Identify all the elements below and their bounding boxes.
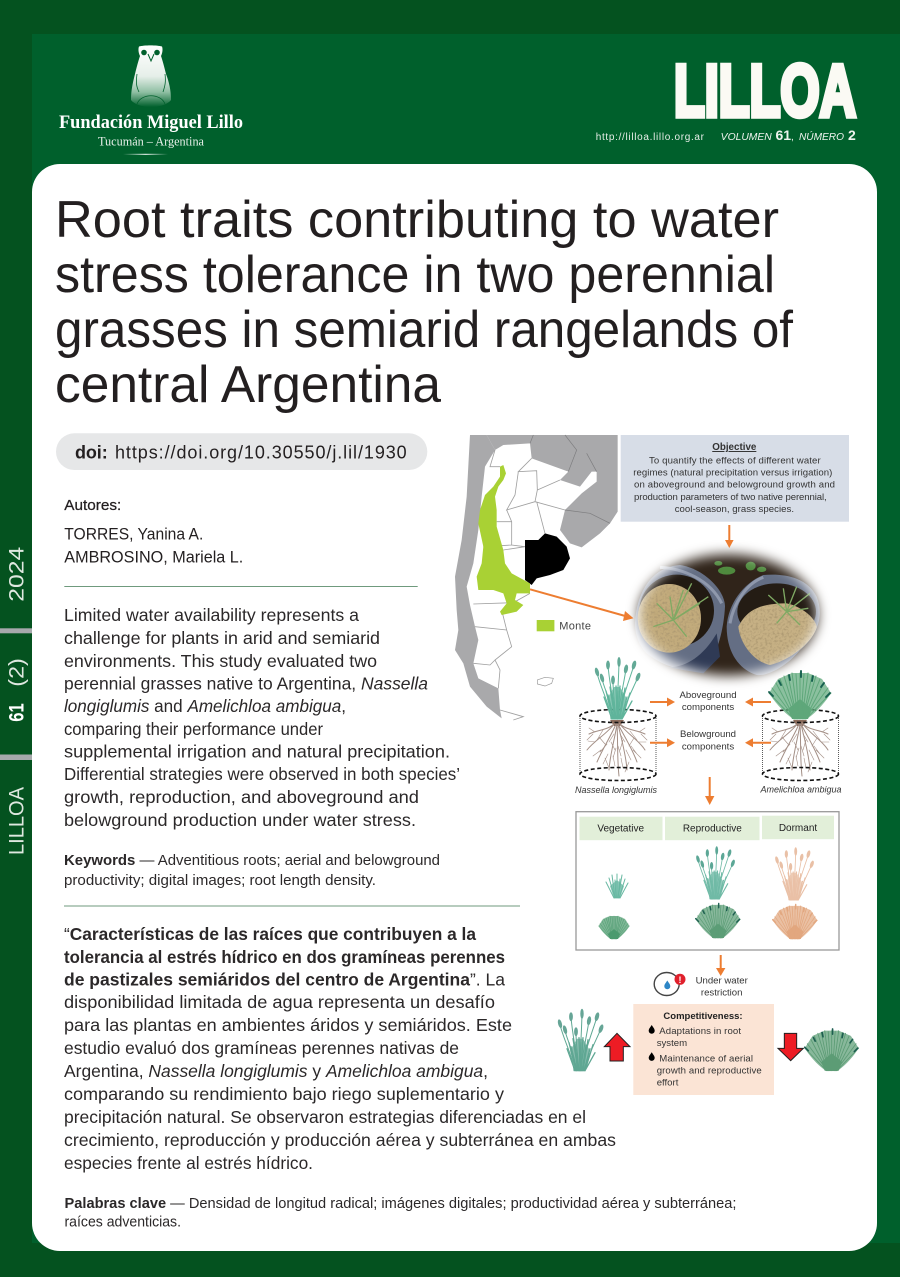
growth stages table xyxy=(576,812,839,950)
english abstract: growth, reproduction, and aboveground and xyxy=(64,787,419,807)
volume and number: 2 xyxy=(848,127,856,143)
plant: Amelichloa xyxy=(805,1029,859,1071)
white content card xyxy=(32,164,877,1251)
sidebar issue: (2) xyxy=(5,658,28,687)
objective heading: Objective xyxy=(712,442,757,453)
english abstract: challenge for plants in arid and semiarid xyxy=(64,628,380,648)
sidebar separators xyxy=(0,628,32,760)
component labels: Belowground xyxy=(680,729,736,740)
competitiveness list: system xyxy=(657,1038,687,1049)
title: central Argentina xyxy=(55,356,441,414)
title: stress tolerance in two perennial xyxy=(55,246,775,304)
component labels: components xyxy=(682,702,734,713)
english abstract: belowground production under water stress. xyxy=(64,810,416,830)
spanish abstract: especies frente al estrés hídrico. xyxy=(64,1153,313,1173)
legend: Monte: Monte xyxy=(559,620,591,632)
journal masthead xyxy=(596,51,856,143)
component labels: Aboveground xyxy=(679,690,737,701)
spanish abstract: crecimiento, reproducción y producción aérea y subterránea en ambas xyxy=(64,1130,616,1150)
volume and number: 61 xyxy=(776,127,791,143)
reproductive plants xyxy=(695,846,740,938)
photo of two grass bags xyxy=(629,544,828,686)
logo: Fundación Miguel Lillo xyxy=(59,45,243,155)
provincial borders xyxy=(473,450,565,720)
competitiveness box xyxy=(633,1004,774,1095)
icon: water restriction: ! xyxy=(678,975,682,985)
dormant plants xyxy=(773,847,817,939)
sidebar xyxy=(0,546,32,855)
title: grasses in semiarid rangelands of xyxy=(55,301,794,359)
sidebar volume: 61 xyxy=(5,703,28,722)
stage headers: Dormant xyxy=(779,823,817,834)
authors xyxy=(64,498,243,567)
spanish abstract: precipitación natural. Se observaron estrategias diferenciadas en el xyxy=(64,1107,586,1127)
spanish abstract xyxy=(64,924,616,1173)
author names: AMBROSINO, Mariela L. xyxy=(64,549,243,567)
doi pill xyxy=(56,433,427,470)
bullet drops xyxy=(649,1025,655,1061)
spanish abstract: comparando su rendimiento bajo riego suplementario y xyxy=(64,1084,504,1104)
volume and number: VOLUMEN xyxy=(721,132,773,143)
competitiveness list: growth and reproductive xyxy=(657,1066,762,1076)
authors label: Autores: xyxy=(64,498,121,514)
objective text: To quantify the effects of different water xyxy=(649,455,821,466)
spanish keywords: Palabras clave — Densidad de longitud radical; imágenes digitales; productividad aérea y subterránea; xyxy=(64,1196,736,1212)
sidebar journal name: LILLOA xyxy=(5,787,28,855)
country borders xyxy=(530,435,610,523)
arrow: decrease xyxy=(778,1033,803,1061)
competitiveness heading: Competitiveness: xyxy=(663,1011,743,1022)
english keywords xyxy=(64,853,440,889)
arrow: increase xyxy=(604,1033,630,1061)
icon: water restriction xyxy=(654,972,686,996)
spanish keywords: raíces adventicias. xyxy=(64,1215,181,1231)
stage headers: Vegetative xyxy=(597,824,644,834)
component labels: components xyxy=(682,742,734,752)
species labels xyxy=(575,784,842,795)
english keywords: productivity; digital images; root length density. xyxy=(64,873,376,889)
arrow: objective to photo xyxy=(725,525,734,548)
species labels: Amelichloa ambigua xyxy=(759,784,842,794)
journal url: http://lilloa.lillo.org.ar xyxy=(596,132,705,143)
spanish abstract: de pastizales semiáridos del centro de Argentina”. La xyxy=(64,970,505,990)
vegetative plants xyxy=(598,874,630,939)
objective box xyxy=(621,435,849,522)
competitiveness list: Adaptations in root xyxy=(659,1026,741,1037)
spanish abstract: tolerancia al estrés hídrico en dos gramíneas perennes xyxy=(64,947,505,967)
volume and number: , xyxy=(791,132,794,143)
logo name: Fundación Miguel Lillo xyxy=(59,112,243,133)
plant cylinders xyxy=(575,657,842,805)
english abstract: longiglumis and Amelichloa ambigua, xyxy=(64,696,346,716)
arrow: to growth stages xyxy=(705,777,714,805)
component labels xyxy=(679,690,737,752)
objective text: production parameters of two native perennial, xyxy=(634,492,827,503)
graphical abstract xyxy=(455,435,859,1095)
sidebar year: 2024 xyxy=(5,546,28,602)
water restriction label: restriction xyxy=(701,988,742,998)
objective text xyxy=(633,455,835,515)
objective text: regimes (natural precipitation versus irrigation) xyxy=(633,468,832,479)
volume and number: NÚMERO xyxy=(799,130,844,143)
islands xyxy=(537,677,553,686)
arrows to components xyxy=(650,698,771,747)
title: Root traits contributing to water xyxy=(55,191,779,249)
english abstract: environments. This study evaluated two xyxy=(64,651,377,671)
doi pill: doi: xyxy=(75,442,108,462)
arrows in the upper flow xyxy=(530,525,734,621)
english abstract: comparing their performance under xyxy=(64,719,323,739)
english abstract: perennial grasses native to Argentina, Nassella xyxy=(64,674,428,694)
objective text: on aboveground and belowground growth and xyxy=(634,480,835,491)
spanish abstract: Argentina, Nassella longiglumis y Amelichloa ambigua, xyxy=(64,1061,488,1081)
spanish abstract: estudio evaluó dos gramíneas perennes nativas de xyxy=(64,1038,459,1058)
arrow: map to photo xyxy=(530,589,634,621)
doi pill: https://doi.org/10.30550/j.lil/1930 xyxy=(115,442,407,462)
stage headers: Reproductive xyxy=(683,824,742,834)
competitiveness list: effort xyxy=(657,1077,679,1088)
objective text: cool-season, grass species. xyxy=(675,504,794,515)
water restriction label: Under water xyxy=(696,976,749,986)
author names: TORRES, Yanina A. xyxy=(64,525,203,543)
Monte region xyxy=(477,465,530,615)
spanish abstract: “Características de las raíces que contribuyen a la xyxy=(64,924,476,944)
legend: Monte xyxy=(537,620,591,632)
title xyxy=(55,191,794,414)
Nassella longiglumis cylinder xyxy=(580,657,656,780)
spanish abstract: disponibilidad limitada de agua representa un desafío xyxy=(64,992,495,1012)
water restriction label xyxy=(696,976,749,998)
english keywords: Keywords — Adventitious roots; aerial and belowground xyxy=(64,853,440,869)
arrow: to water restriction xyxy=(716,955,725,976)
spanish abstract: para las plantas en ambientes áridos y semiáridos. Este xyxy=(64,1015,512,1035)
stage headers xyxy=(580,816,834,840)
english abstract: Differential strategies were observed in both species’ xyxy=(64,764,460,784)
english abstract xyxy=(64,605,460,830)
plant: Nassella xyxy=(557,1009,604,1071)
neighbouring countries xyxy=(455,435,618,718)
logo place: Tucumán – Argentina xyxy=(98,135,204,149)
icon: owl xyxy=(131,45,171,107)
map of Argentina xyxy=(455,435,618,720)
species labels: Nassella longiglumis xyxy=(575,785,658,795)
competitiveness list: Maintenance of aerial xyxy=(659,1054,753,1065)
Buenos Aires province xyxy=(525,533,570,585)
Amelichloa ambigua cylinder xyxy=(762,671,838,780)
water restriction section xyxy=(557,955,859,1095)
author names xyxy=(64,525,243,567)
english abstract: Limited water availability represents a xyxy=(64,605,359,625)
competitiveness list xyxy=(657,1026,762,1088)
spanish keywords xyxy=(64,1196,736,1231)
english abstract: supplemental irrigation and natural precipitation. xyxy=(64,742,450,762)
